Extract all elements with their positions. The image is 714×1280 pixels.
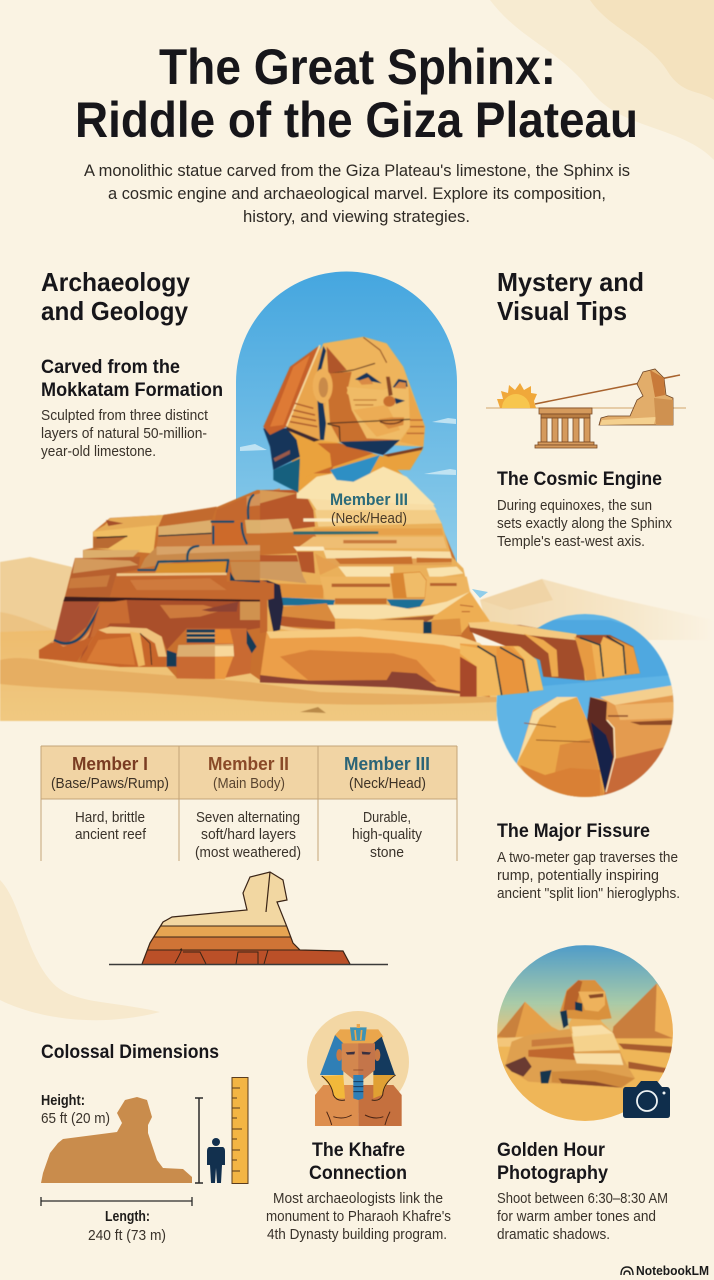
heading: colossal dimensions: Colossal Dimensions [41,1042,219,1063]
subtitle: history, and viewing strategies. [243,207,470,226]
main sphinx illustration [39,337,640,697]
text block: the major fissure: The Major Fissure [497,821,650,842]
column: member I: Member I [72,754,148,774]
height bar [195,1098,203,1183]
title: The Great Sphinx: [159,39,556,95]
section heading: archaeology and geology [41,267,190,326]
text block: golden hour photography: Golden Hour [497,1140,606,1161]
column: member II: (Main Body) [213,775,285,792]
text block: the major fissure: A two-meter gap traverses the [497,849,678,866]
text block: the major fissure: ancient "split lion" hieroglyphs. [497,885,680,902]
text block: the khafre connection [266,1140,451,1243]
right rock [590,687,674,800]
knob [390,572,427,598]
desert background dunes [0,557,714,721]
ear [313,369,333,403]
left bands [260,490,315,533]
pyramids [497,1002,559,1038]
diagram: sphinx strata cross-section [109,870,388,964]
sphinx body [505,1028,635,1087]
column: member I: ancient reef [75,826,147,843]
height label: 65 ft (20 m) [41,1110,110,1127]
neck [287,427,435,505]
dark gap right of rump [270,582,280,632]
text block: the cosmic engine: During equinoxes, the sun [497,497,652,514]
navy gap [267,580,283,632]
nemes side [263,345,320,435]
section heading: mystery and visual tips [497,267,644,326]
text block: carved from the mokkatam formation: layers of natural 50-million- [41,425,207,442]
label: member III on sphinx [330,490,408,527]
lower panel [54,602,100,647]
scale diagram: colossal dimensions [41,1078,248,1244]
subtitle [84,161,630,226]
icon: person [207,1138,225,1183]
text block: the major fissure: rump, potentially inspiring [497,867,659,884]
sphinx head [263,337,435,505]
text block: golden hour photography: Photography [497,1163,608,1184]
cap [327,347,347,374]
circle: golden hour sphinx [495,945,673,1125]
sky sliver right of chest [472,589,488,598]
ruler [232,1078,248,1184]
notebooklm logo: NotebookLM [636,1263,709,1278]
column: member I: Hard, brittle [75,809,145,826]
rear haunch block [80,627,167,667]
length label: Length: [105,1208,150,1225]
section heading: mystery and visual tips: Mystery and [497,267,644,297]
icon: equinox alignment [486,369,686,448]
far paw [468,622,640,681]
column: member II: Member II [208,754,289,774]
sphinx silhouette [41,1097,192,1183]
text block: golden hour photography [497,1140,668,1243]
bright bands [303,490,437,510]
sand bands [618,1043,673,1053]
section heading: mystery and visual tips: Visual Tips [497,296,627,326]
table: limestone members [41,746,457,861]
column: member II: Seven alternating [196,809,300,826]
text block: carved from the mokkatam formation: year-old limestone. [41,443,156,460]
near paw [260,628,500,695]
near paw toes [460,643,543,697]
column: member III [344,754,430,861]
text block: golden hour photography: for warm amber tones and [497,1208,656,1225]
column: member II [195,754,301,861]
cracks [138,495,253,572]
title [75,39,638,148]
cream ledge [323,592,470,619]
head [568,1018,611,1032]
column: member III: (Neck/Head) [349,775,426,792]
text block: the major fissure [497,821,680,902]
text block: the cosmic engine [497,469,672,550]
icon: pharaoh khafre [307,1011,409,1126]
base silhouette [39,473,490,697]
section heading: archaeology and geology: and Geology [41,296,188,326]
column: member III: Member III [344,754,430,774]
circle: major fissure [496,610,674,800]
jaw shadow [340,440,400,455]
subtitle: A monolithic statue carved from the Giza Plateau's limestone, the Sphinx is [84,161,630,180]
text block: golden hour photography: dramatic shadows. [497,1226,610,1243]
label: member III on sphinx: (Neck/Head) [331,510,407,527]
length label: 240 ft (73 m) [88,1227,166,1244]
text block: the khafre connection: Most archaeologists link the [273,1190,443,1207]
title: Riddle of the Giza Plateau [75,92,638,148]
text block: golden hour photography: Shoot between 6:30–8:30 AM [497,1190,668,1207]
mini sphinx [599,369,673,425]
text block: carved from the mokkatam formation: Carved from the [41,357,180,378]
text block: carved from the mokkatam formation: Sculpted from three distinct [41,407,209,424]
right wedge [430,592,490,635]
teal accents [282,597,335,605]
chest strata [260,490,490,635]
temple [535,408,597,448]
text block: carved from the mokkatam formation [41,357,223,460]
text block: the cosmic engine: sets exactly along the Sphinx [497,515,672,532]
side block [177,628,252,679]
nose [383,396,395,407]
column: member I [51,754,169,843]
text block: the khafre connection: monument to Pharaoh Khafre's [266,1208,451,1225]
text block: the cosmic engine: Temple's east-west axis. [497,533,645,550]
mouth [378,417,404,429]
text block: the khafre connection: Connection [309,1163,407,1184]
column: member II: soft/hard layers [201,826,296,843]
label: member III on sphinx: Member III [330,490,408,509]
text block: the khafre connection: The Khafre [312,1140,405,1161]
icon: camera [623,1081,670,1118]
subtitle: a cosmic engine and archaeological marvel. Explore its composition, [108,184,606,203]
column: member II: (most weathered) [195,844,301,861]
column: member III: Durable, [363,809,411,826]
column: member III: high-quality [352,826,422,843]
column: member III: stone [370,844,404,861]
height label [41,1092,110,1127]
length label [88,1208,166,1244]
clouds in arch [240,418,456,475]
head base [287,337,425,447]
sky arch [236,272,457,565]
left rock [517,697,606,800]
length bar [41,1197,192,1206]
crack [587,697,614,792]
right nemes [400,380,425,447]
text block: the khafre connection: 4th Dynasty building program. [267,1226,447,1243]
text block: the cosmic engine: The Cosmic Engine [497,469,662,490]
rump and left strata [39,488,280,679]
face [327,372,400,442]
text block: carved from the mokkatam formation: Mokkatam Formation [41,380,223,401]
column: member I: (Base/Paws/Rump) [51,775,169,792]
height label: Height: [41,1092,85,1109]
section heading: archaeology and geology: Archaeology [41,267,190,297]
eyes [355,373,382,383]
